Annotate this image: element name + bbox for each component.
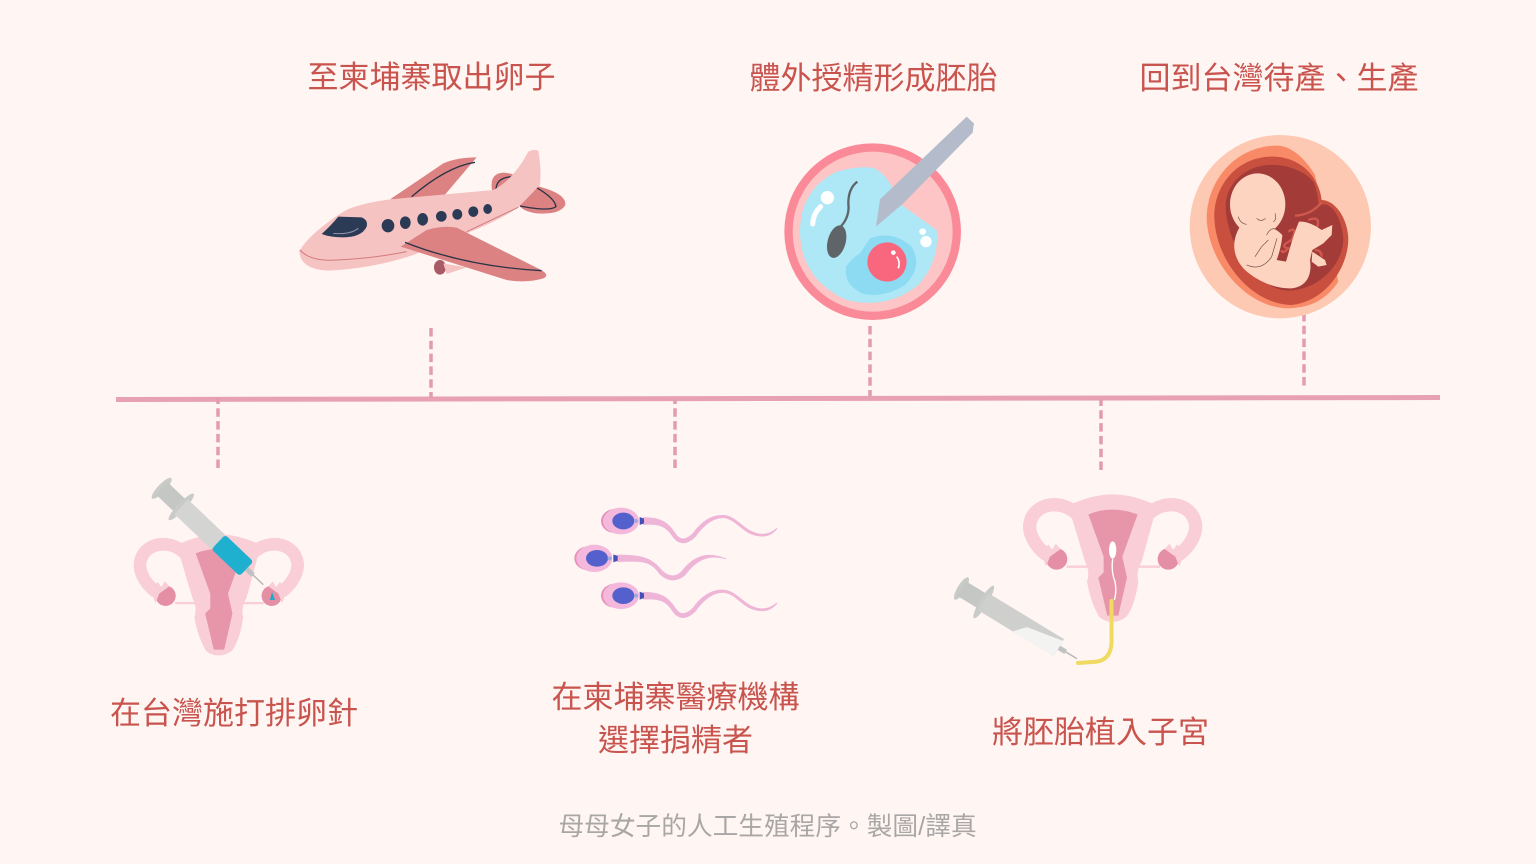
icon: fertilisation xyxy=(784,117,974,320)
connector: step 3 xyxy=(673,400,677,468)
connector: step 4 xyxy=(868,326,872,396)
heading: return to Taiwan: 回到台灣待產、生產 xyxy=(1140,61,1418,96)
embryo in uterus xyxy=(1109,541,1116,600)
connector: step 2 xyxy=(429,328,433,398)
heading: retrieve eggs in Cambodia: 至柬埔寨取出卵子 xyxy=(308,60,556,95)
connector: step 1 xyxy=(216,398,220,468)
sperm middle xyxy=(574,545,726,580)
connector: step 5 xyxy=(1099,400,1103,470)
sperm top xyxy=(601,508,777,543)
icon: uterus with injection xyxy=(140,472,298,655)
timeline axis xyxy=(116,398,1440,400)
uterus xyxy=(1030,494,1196,622)
connector: step 6 xyxy=(1302,313,1306,386)
heading: choose sperm donor: 選擇捐精者 xyxy=(598,723,753,758)
icon: three sperm xyxy=(574,508,777,617)
icon: fetus in womb xyxy=(1190,135,1371,318)
heading: choose sperm donor: 在柬埔寨醫療機構 xyxy=(552,680,800,715)
syringe xyxy=(948,570,1087,675)
sperm bottom xyxy=(601,582,777,617)
heading: injections in Taiwan: 在台灣施打排卵針 xyxy=(110,696,358,731)
icon: airplane xyxy=(299,150,565,281)
icon: embryo transfer xyxy=(948,494,1196,675)
caption: 母母女子的人工生殖程序。製圖/譯真 xyxy=(558,812,977,841)
syringe with blue liquid xyxy=(146,472,276,598)
heading: IVF embryo: 體外授精形成胚胎 xyxy=(750,61,998,96)
heading: embryo transfer: 將胚胎植入子宮 xyxy=(992,715,1209,750)
follicle drop xyxy=(270,592,275,600)
uterus xyxy=(140,534,298,655)
yellow catheter xyxy=(1078,601,1112,663)
heading: choose sperm donor xyxy=(552,680,800,758)
